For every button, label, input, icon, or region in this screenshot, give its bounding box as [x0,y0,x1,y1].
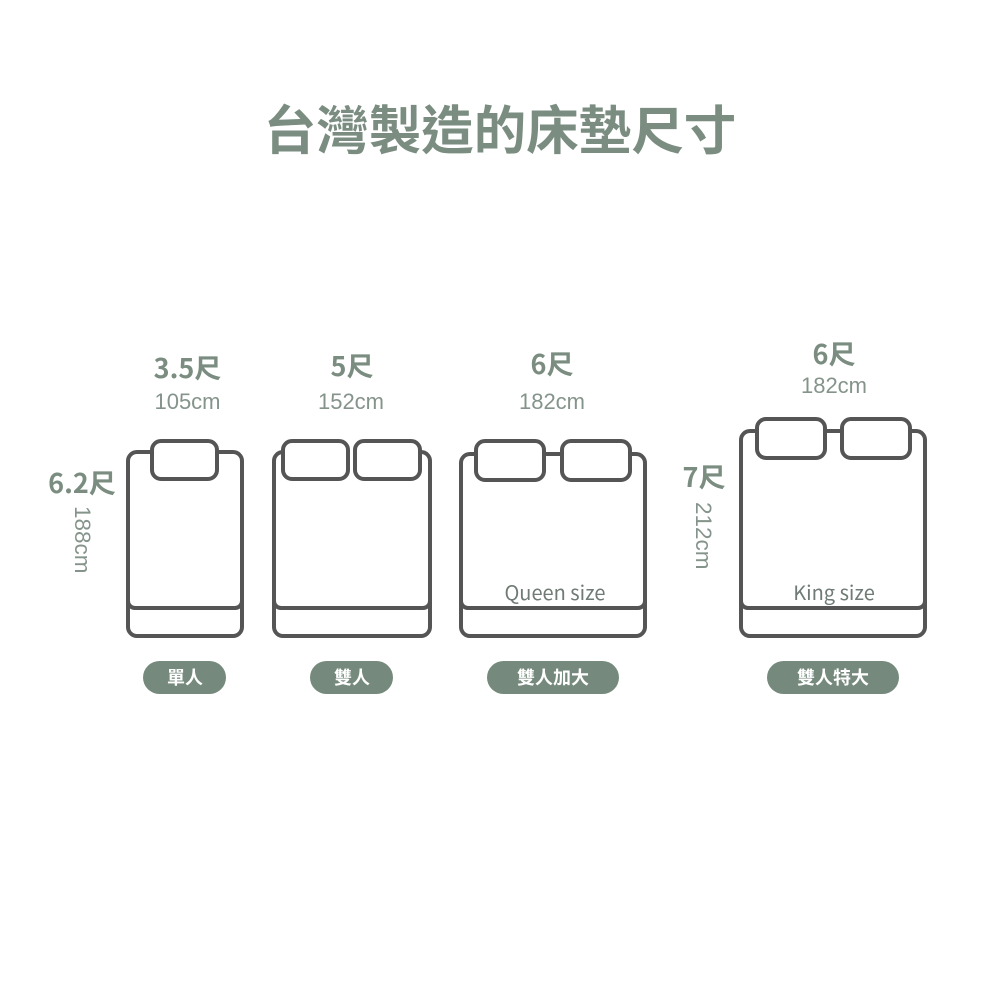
pill: 單人 [143,661,226,694]
width cm: 152cm: 152cm [318,389,384,414]
width cm: 105cm: 105cm [154,389,221,414]
width cm: 182cm queen: 182cm [519,389,585,414]
width cm: 182cm king: 182cm [801,373,867,398]
bed: single [128,441,242,636]
length label: 7尺: 7尺 [683,456,725,495]
pill: 雙人特大: 雙人特大 [797,664,869,690]
caption: Queen size: Queen size [504,577,606,606]
length label: 6.2尺: 6.2尺 [48,462,116,501]
bed: double [274,441,430,636]
width label: 5尺: 5尺 [331,345,373,384]
title: 台灣製造的床墊尺寸 [264,89,736,165]
pill: 雙人加大: 雙人加大 [517,664,589,690]
length cm: 212cm: 212cm [691,502,716,570]
bed: queen [461,441,645,636]
caption: King size: King size [793,577,875,606]
pill: 單人: 單人 [167,664,203,690]
pill: 雙人特大 [767,661,899,694]
bed: king [741,419,925,636]
length cm: 188cm: 188cm [70,506,95,574]
pill: 雙人 [310,661,393,694]
width label: 3.5尺: 3.5尺 [154,347,221,386]
pill: 雙人: 雙人 [334,664,370,690]
width label: 6尺 king: 6尺 [813,333,855,372]
pill: 雙人加大 [487,661,619,694]
width label: 6尺 queen: 6尺 [531,343,573,382]
